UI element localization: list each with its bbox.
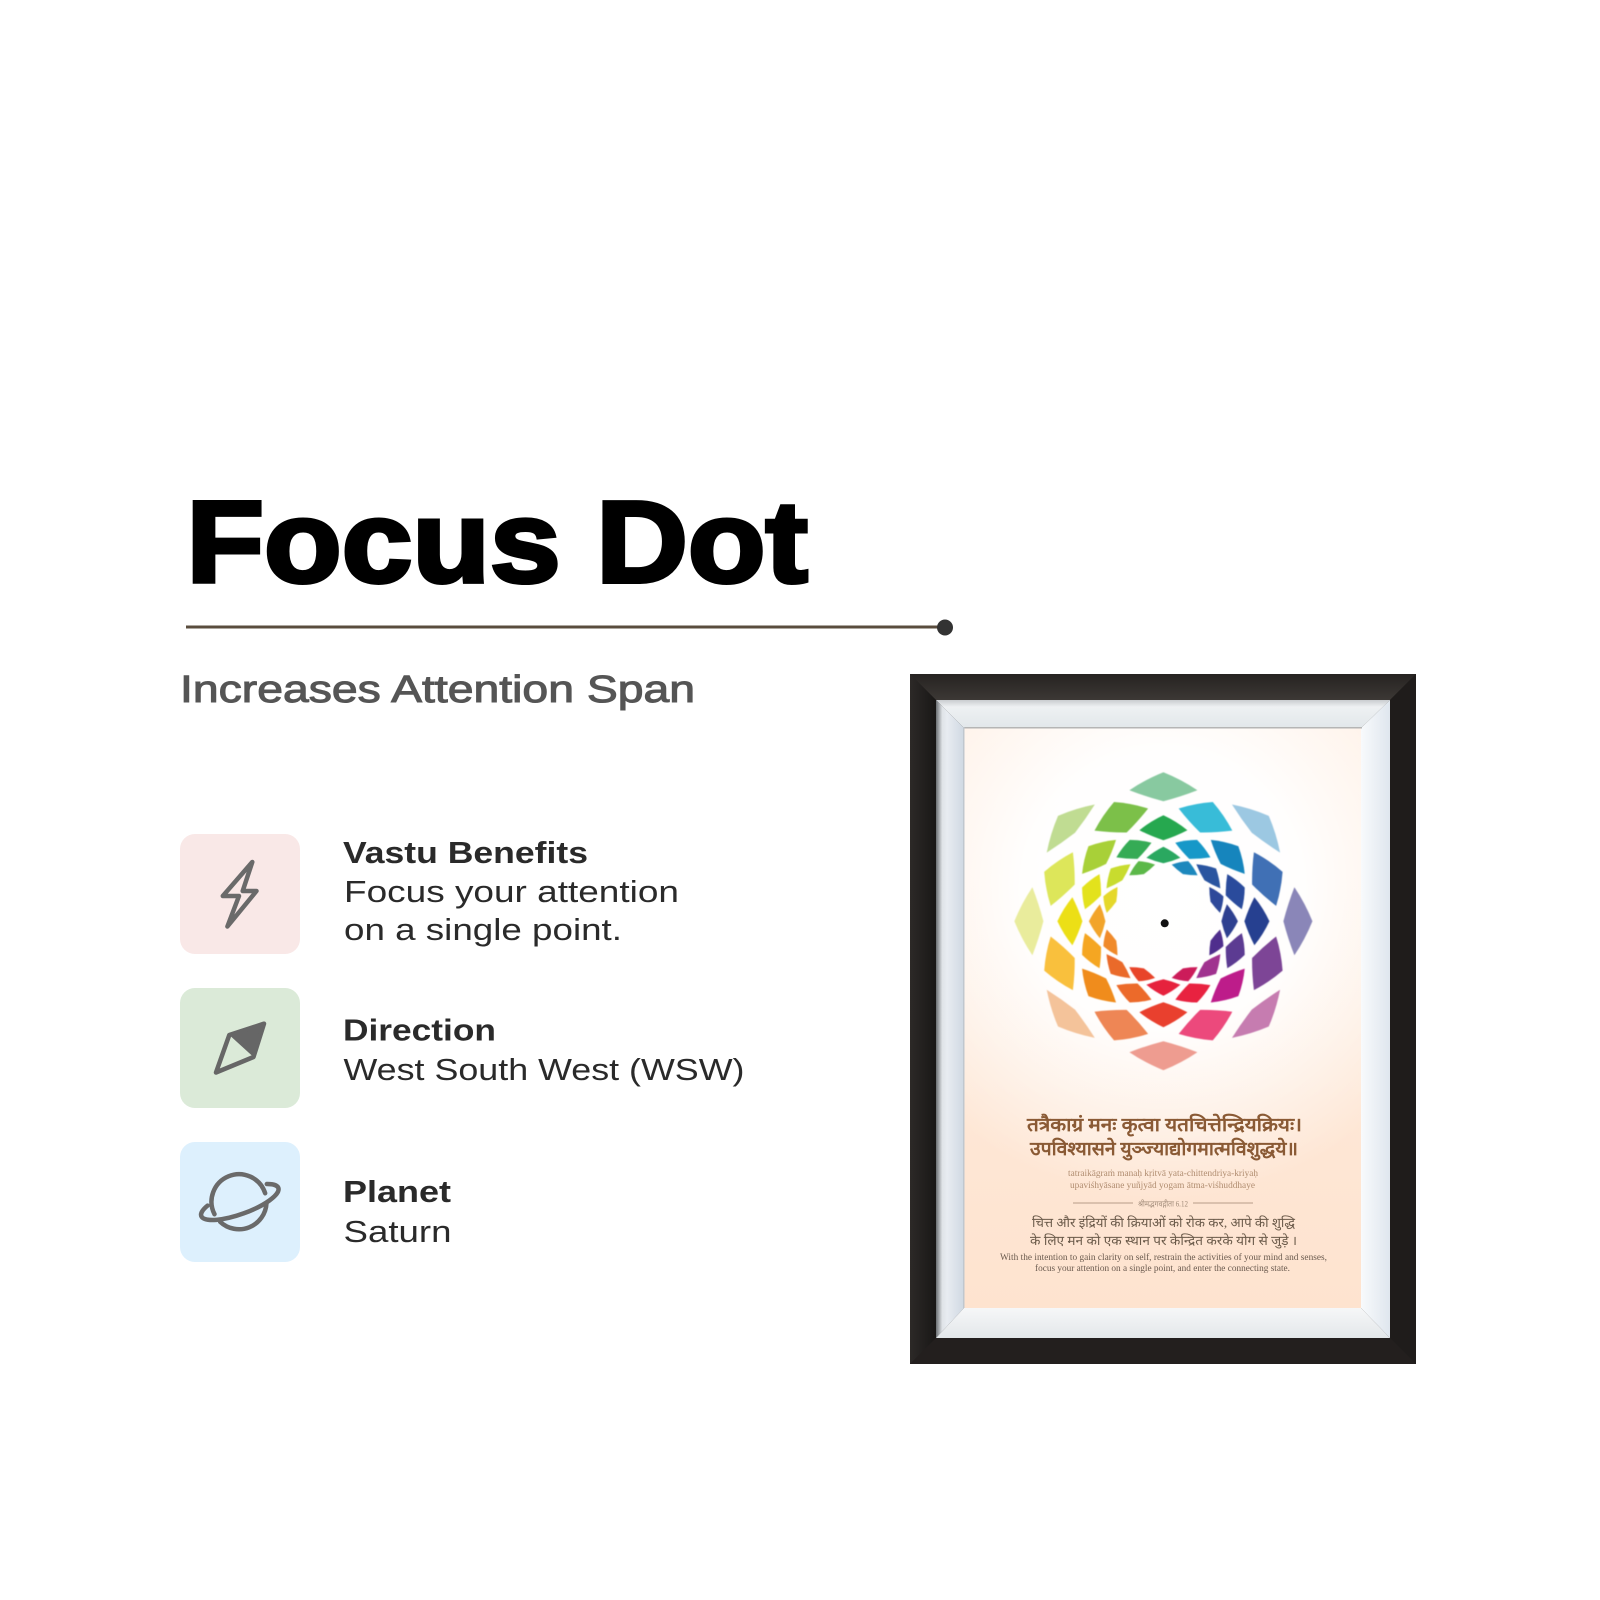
focus dot xyxy=(1161,919,1169,927)
second layer cells xyxy=(1033,791,1294,1051)
subtitle: Increases Attention Span xyxy=(180,669,695,711)
vastu benefits text xyxy=(343,835,679,947)
transliteration: tatraikāgraṁ manaḥ kṛitvā yata-chittendriya-kriyaḥ xyxy=(1068,1169,1258,1179)
hindi translation xyxy=(1030,1215,1297,1249)
sanskrit verse: उपविश्यासने युञ्ज्याद्योगमात्मविशुद्धये॥ xyxy=(1029,1137,1298,1161)
panel: planet xyxy=(180,1142,452,1262)
transliteration xyxy=(1068,1169,1258,1191)
panel: direction xyxy=(180,988,744,1108)
english translation: With the intention to gain clarity on self, restrain the activities of your mind and senses, xyxy=(1000,1252,1327,1263)
panel: vastu benefits xyxy=(180,834,679,954)
poster paper xyxy=(963,727,1362,1308)
english translation: focus your attention on a single point, and enter the connecting state. xyxy=(1035,1263,1290,1274)
english translation xyxy=(1000,1252,1327,1274)
hindi translation: चित्त और इंद्रियों की क्रियाओं को रोक कर, आपे की शुद्धि xyxy=(1032,1215,1296,1231)
sanskrit verse xyxy=(1026,1113,1302,1161)
white mat xyxy=(936,700,1390,1338)
planet text: Planet xyxy=(343,1174,451,1209)
planet text xyxy=(343,1174,452,1249)
direction text xyxy=(343,1012,744,1087)
chart: rainbow mandala xyxy=(1014,772,1312,1070)
black outer frame xyxy=(910,674,1416,1364)
hindi translation: के लिए मन को एक स्थान पर केन्द्रित करके योग से जुड़े । xyxy=(1030,1233,1297,1249)
direction text: Direction xyxy=(343,1012,496,1048)
vastu benefits text: on a single point. xyxy=(344,912,622,947)
direction text: West South West (WSW) xyxy=(344,1052,744,1087)
vastu benefits text: Focus your attention xyxy=(344,874,679,909)
icon: lightning bolt tile xyxy=(180,834,300,954)
planet text: Saturn xyxy=(344,1214,452,1249)
fourth layer cells xyxy=(1075,833,1252,1010)
third layer cells xyxy=(1057,815,1269,1027)
verse source divider: श्रीमद्भगवद्गीता 6.12 xyxy=(1138,1198,1188,1208)
title rule with end dot xyxy=(186,620,953,636)
sanskrit verse: तत्रैकाग्रं मनः कृत्वा यतचित्तेन्द्रियक्रियः। xyxy=(1026,1113,1302,1137)
outer petals xyxy=(1014,772,1312,1070)
panel: framed poster xyxy=(910,674,1416,1364)
inner layer cells xyxy=(1098,856,1229,987)
vastu benefits text: Vastu Benefits xyxy=(343,835,588,870)
title: Focus Dot xyxy=(186,477,808,607)
icon: saturn tile xyxy=(180,1142,300,1262)
fifth layer cells xyxy=(1089,847,1238,996)
transliteration: upaviśhyāsane yuñjyād yogam ātma-viśhuddhaye xyxy=(1070,1181,1255,1191)
icon: compass needle tile xyxy=(180,988,300,1108)
